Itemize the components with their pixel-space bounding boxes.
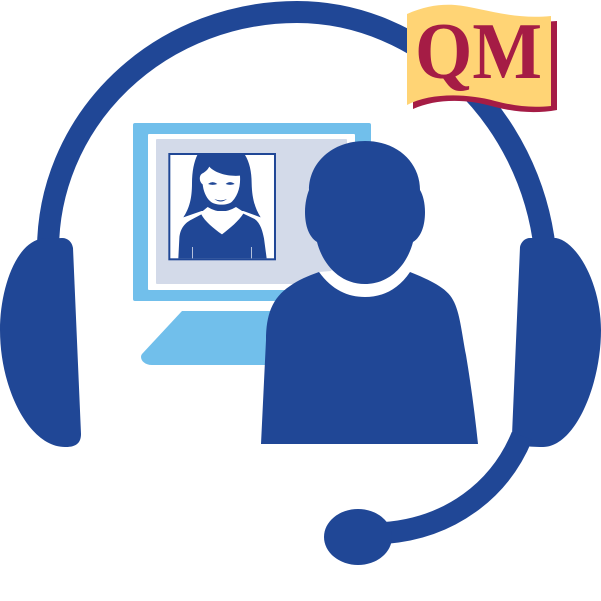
person silhouette xyxy=(261,141,478,444)
flag shadow xyxy=(413,21,557,112)
portrait of woman on screen xyxy=(169,154,275,259)
flag body xyxy=(407,5,551,107)
portrait frame xyxy=(169,154,275,259)
monitor screen xyxy=(148,134,355,290)
right ear cup xyxy=(512,238,601,447)
monitor xyxy=(133,123,371,365)
white collar gap xyxy=(319,262,410,298)
monitor bezel xyxy=(133,123,371,301)
monitor stand xyxy=(141,311,300,365)
screen panel xyxy=(156,139,347,284)
shoulders and top xyxy=(178,214,267,258)
left ear cup xyxy=(0,238,81,447)
QM letters: QM xyxy=(415,8,542,96)
hair xyxy=(183,155,261,217)
microphone boom and mic xyxy=(324,436,522,565)
headset band xyxy=(48,12,545,250)
eyes and mouth xyxy=(208,182,235,201)
QM logo flag xyxy=(407,5,557,112)
torso xyxy=(261,272,478,444)
head xyxy=(305,141,425,284)
neck xyxy=(199,207,247,238)
face xyxy=(200,167,240,205)
